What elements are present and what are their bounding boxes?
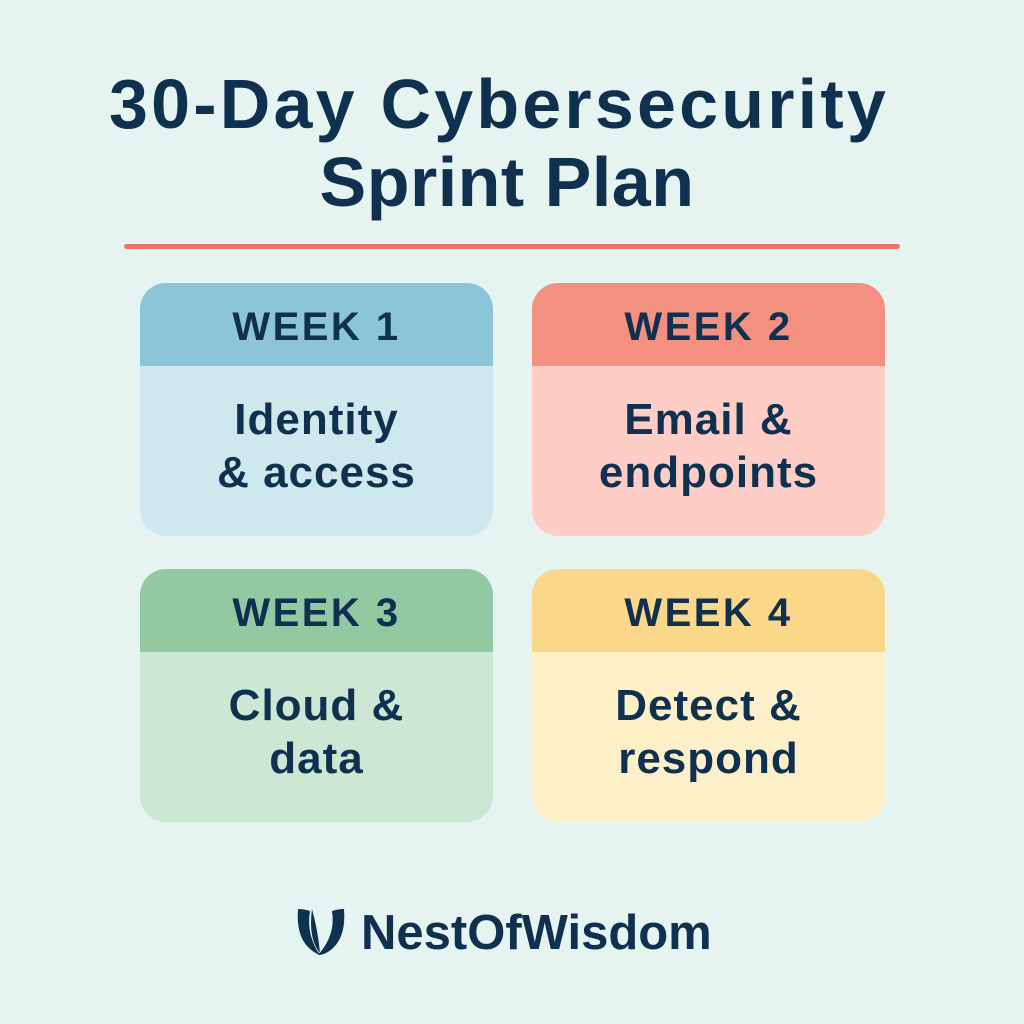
header: week 3 — [140, 569, 493, 652]
title — [109, 65, 889, 221]
text: detect & respond — [532, 652, 885, 822]
text: cloud & data: Cloud & — [229, 681, 404, 730]
text: email & endpoints: Email & — [624, 395, 793, 444]
card: week 1 — [140, 283, 493, 536]
header: week 2 — [532, 283, 885, 366]
card: week 2 — [532, 283, 885, 536]
text: cloud & data: data — [269, 734, 364, 783]
header: week 2: WEEK 2 — [624, 305, 793, 349]
text: identity & access — [140, 366, 493, 536]
text: identity & access: Identity — [234, 395, 399, 444]
text: cloud & data — [140, 652, 493, 822]
text: detect & respond: respond — [618, 734, 799, 783]
text: detect & respond: Detect & — [615, 681, 802, 730]
header: week 1 — [140, 283, 493, 366]
title: 30-Day Cybersecurity — [109, 65, 889, 143]
brand name: NestOfWisdom — [361, 906, 712, 960]
header: week 4 — [532, 569, 885, 652]
header: week 4: WEEK 4 — [624, 591, 793, 635]
text: email & endpoints — [532, 366, 885, 536]
header: week 1: WEEK 1 — [232, 305, 401, 349]
icon: leaf — [298, 909, 344, 955]
header: week 3: WEEK 3 — [232, 591, 401, 635]
text: email & endpoints: endpoints — [599, 448, 818, 497]
logo — [298, 906, 712, 960]
card: week 4 — [532, 569, 885, 822]
card: week 3 — [140, 569, 493, 822]
title: Sprint Plan — [320, 143, 694, 221]
text: identity & access: & access — [217, 448, 416, 497]
